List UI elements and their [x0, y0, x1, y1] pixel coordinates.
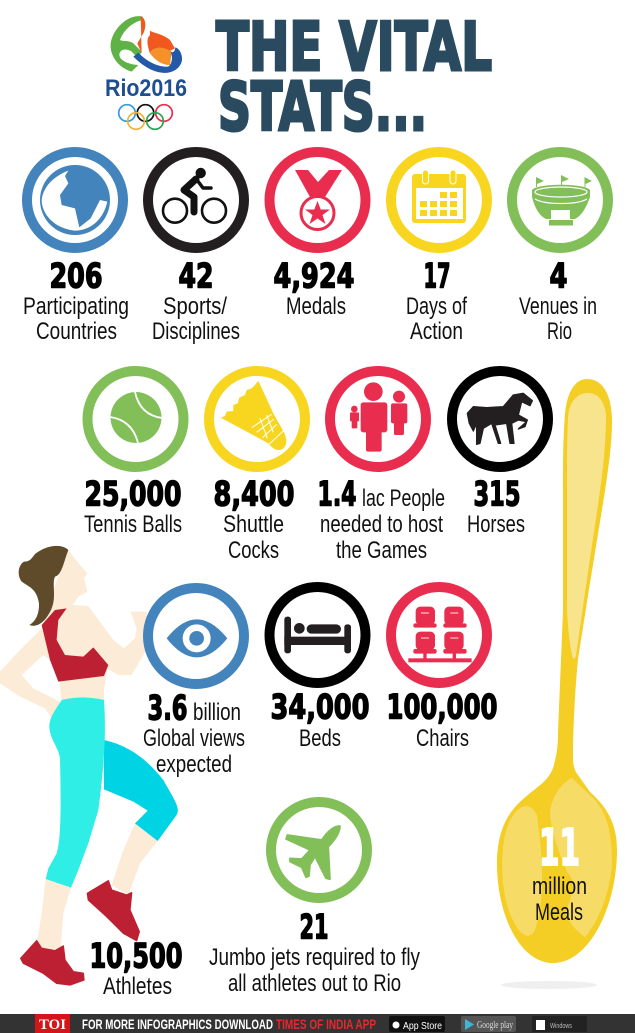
spoon shadow: [501, 981, 597, 989]
icon: stadium: [512, 152, 608, 248]
stat: 21 jumbo jets: 21: [300, 908, 328, 946]
logo emblem: [111, 16, 182, 73]
stat: 25,000 tennis balls: Tennis Balls: [84, 511, 182, 538]
title: THE VITAL: [216, 8, 492, 86]
stat: 8,400 shuttle cocks: 8,400: [214, 474, 294, 514]
stat: 34,000 beds: Beds: [299, 725, 341, 752]
footer message: TIMES OF INDIA APP: [276, 1016, 376, 1032]
app store badge: [389, 1016, 445, 1032]
stat: 21 jumbo jets: Jumbo jets required to fly: [209, 944, 420, 971]
stat: 206 countries: [23, 152, 129, 345]
stat: 206 countries: Countries: [36, 318, 117, 345]
hair: [19, 546, 68, 626]
stat: 1.4 lac people: lac People: [362, 485, 445, 512]
stat: 3.6 billion views: Global views: [143, 725, 245, 752]
stat: 206 countries: 206: [50, 256, 102, 296]
stat: 4 venues: 4: [550, 256, 568, 296]
windows phone badge: Windows: [550, 1023, 572, 1030]
TOI badge: TOI: [39, 1017, 66, 1033]
stat: 100,000 chairs: [386, 587, 498, 752]
runner skin: [0, 550, 158, 952]
icon: shuttlecock: [209, 371, 305, 467]
stat: 4,924 medals: Medals: [286, 293, 346, 320]
stat: 315 horses: 315: [474, 474, 520, 514]
stat: 3.6 billion views: 3.6: [148, 688, 188, 728]
spoon bowl highlights: [502, 806, 542, 936]
stat: 25,000 tennis balls: [84, 371, 184, 538]
logo: Rio 2016: [105, 16, 187, 129]
footer message: FOR MORE INFOGRAPHICS DOWNLOAD: [82, 1016, 273, 1032]
olympic rings: [119, 105, 172, 129]
google play badge: Google play: [477, 1020, 513, 1031]
app store badge: App Store: [403, 1021, 442, 1032]
stat: 42 sports: 42: [178, 256, 214, 296]
white gap inside arm: [22, 655, 62, 703]
stat: 34,000 beds: 34,000: [270, 688, 370, 726]
TOI badge: [35, 1014, 70, 1033]
stat: 10,500 athletes: Athletes: [103, 973, 172, 1000]
windows phone badge: [532, 1016, 587, 1032]
icon: horse: [452, 371, 548, 467]
stat: 11 million meals: [532, 819, 587, 926]
stat: 11 million meals: 11: [539, 819, 580, 878]
stat: 315 horses: Horses: [467, 511, 525, 538]
icon: eye: [148, 588, 244, 684]
icon: bed: [270, 587, 366, 683]
stat: 42 sports: [148, 152, 244, 345]
stat: 3.6 billion views: expected: [156, 751, 232, 778]
stat: 1.4 lac people: needed to host: [320, 511, 443, 538]
stat: 8,400 shuttle cocks: Shuttle: [223, 511, 284, 538]
spoon body: [497, 379, 617, 963]
stat: 21 jumbo jets: all athletes out to Rio: [228, 970, 401, 997]
stat: 10,500 athletes: 10,500: [90, 936, 182, 976]
stat: 17 days: Action: [410, 318, 463, 345]
title: [216, 8, 492, 146]
stat: 100,000 chairs: 100,000: [386, 688, 498, 726]
stat: 25,000 tennis balls: 25,000: [84, 474, 182, 514]
front shoe: [87, 881, 139, 941]
stat: 17 days: 17: [424, 256, 450, 296]
stat: 1.4 lac people: the Games: [336, 537, 427, 564]
front leggings: [104, 740, 178, 841]
icon: globe: [27, 152, 123, 248]
stat: 4 venues: [512, 152, 608, 345]
title: STATS...: [218, 68, 427, 146]
icon: cyclist: [148, 152, 244, 248]
stat: 42 sports: Disciplines: [152, 318, 240, 345]
icon: seats: [391, 587, 487, 683]
stat: 8,400 shuttle cocks: Cocks: [228, 537, 279, 564]
icon: medal: [270, 152, 366, 248]
stat: 4,924 medals: [270, 152, 366, 320]
stat: 34,000 beds: [270, 587, 370, 752]
stat: 17 days: [391, 152, 487, 345]
sports bra: [42, 608, 108, 682]
stat: 315 horses: [452, 371, 548, 538]
rear shoe: [21, 941, 84, 985]
stat: 4 venues: Rio: [547, 318, 572, 345]
stat: 3.6 billion views: billion: [193, 699, 241, 726]
stat: 1.4 lac people: 1.4: [318, 474, 356, 514]
runner illustration: [0, 546, 178, 985]
footer bar: [0, 1014, 635, 1033]
stat: 11 million meals: million: [532, 873, 587, 900]
spoon handle highlight: [567, 393, 606, 659]
rear leggings: [46, 697, 105, 888]
stat: 100,000 chairs: Chairs: [416, 725, 469, 752]
stat: 206 countries: Participating: [23, 293, 129, 320]
icon: people: [330, 371, 426, 467]
icon: tennis ball: [88, 371, 184, 467]
stat: 8,400 shuttle cocks: [209, 371, 305, 564]
stat: 4 venues: Venues in: [519, 293, 597, 320]
stat: 42 sports: Sports/: [163, 293, 227, 320]
stat: 3.6 billion views: [143, 588, 245, 778]
icon: plane: [271, 802, 367, 898]
stat: 10,500 athletes: [90, 936, 182, 1000]
stat: 17 days: Days of: [406, 293, 467, 320]
google play badge: [461, 1016, 516, 1032]
stat: 4,924 medals: 4,924: [274, 256, 354, 296]
icon: calendar: [391, 152, 487, 248]
spoon: [497, 379, 617, 989]
stat: 21 jumbo jets: [209, 802, 420, 997]
logo wordmark: Rio2016: [105, 75, 187, 102]
stat: 1.4 lac people: [318, 371, 445, 564]
stat: 11 million meals: Meals: [535, 899, 583, 926]
